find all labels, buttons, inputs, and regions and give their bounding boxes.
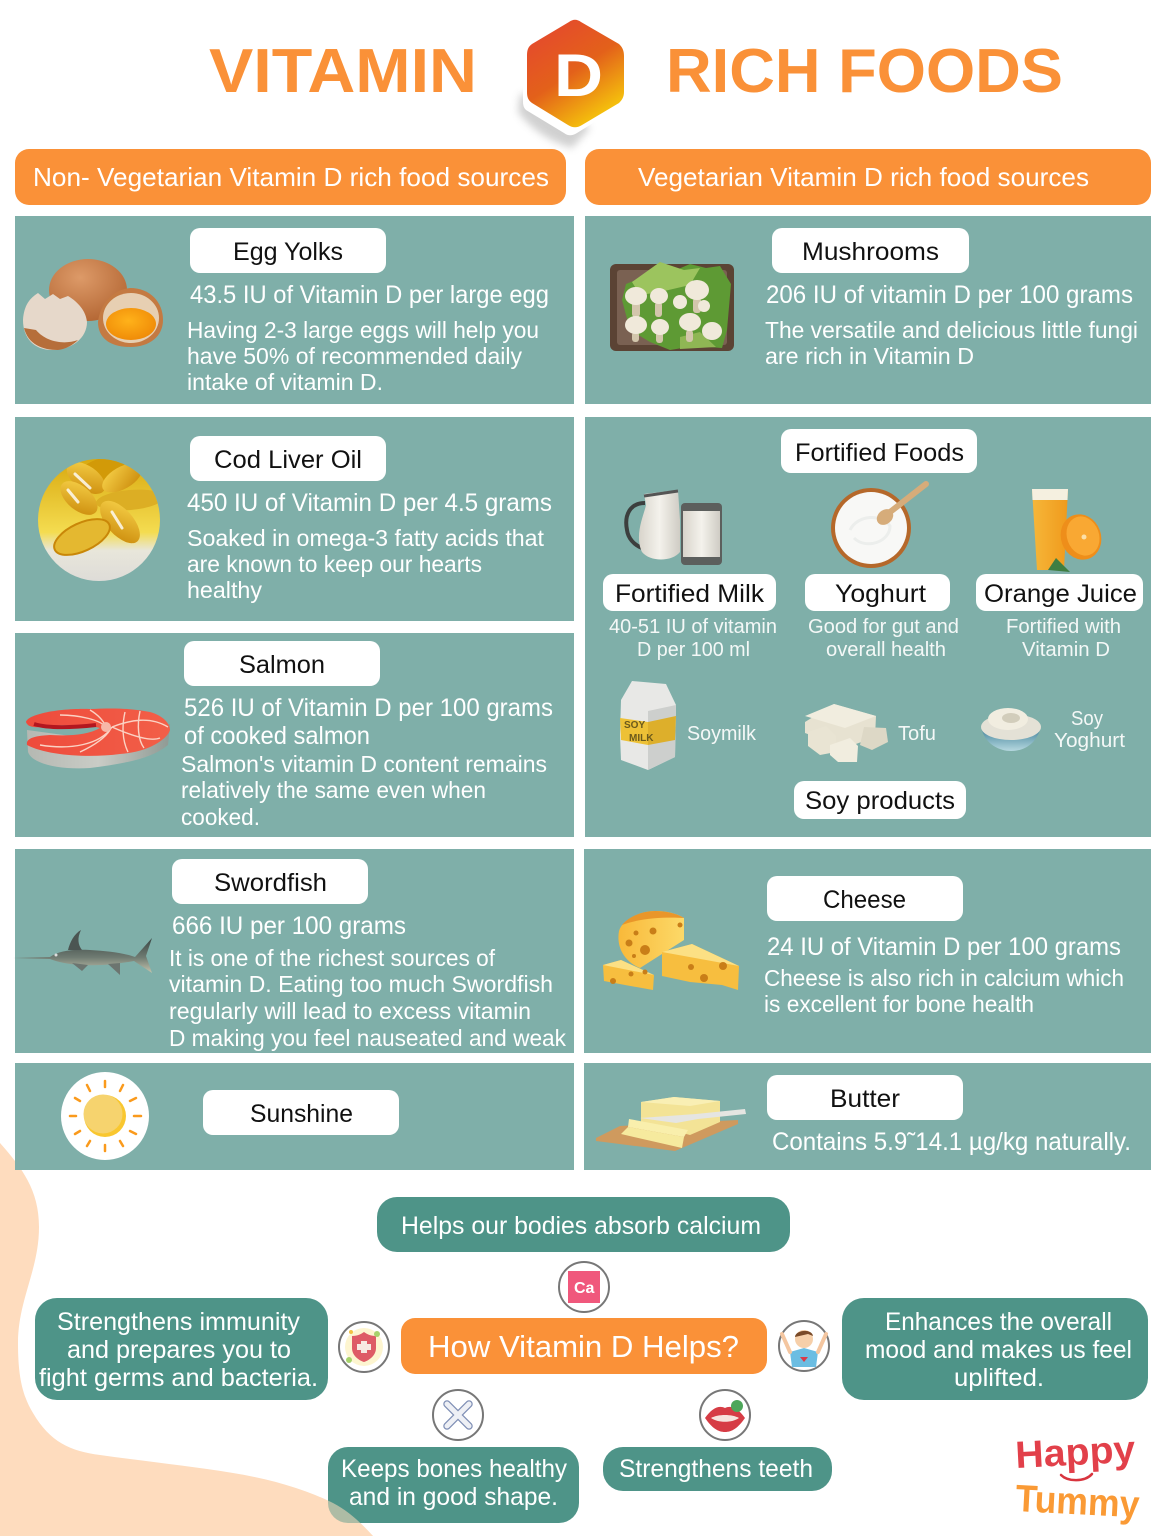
title: RICH FOODS — [666, 37, 1063, 106]
label: fortified foods — [781, 429, 977, 473]
icon: tofu cubes — [805, 704, 888, 762]
icon: yoghurt bowl — [831, 484, 926, 568]
panel: butter — [584, 1063, 1151, 1170]
callout: bones: and in good shape. — [349, 1483, 558, 1511]
label: cheese: Cheese — [823, 886, 906, 914]
heading: non-vegetarian sources — [15, 149, 566, 205]
text: fortified milk — [609, 616, 777, 661]
icon: happy person — [779, 1321, 829, 1371]
icon: soymilk carton: MILK — [629, 733, 654, 744]
logo: Happy Tummy — [1014, 1429, 1141, 1526]
label: egg yolks: Egg Yolks — [233, 238, 343, 266]
text: egg yolks: have 50% of recommended daily — [187, 343, 522, 369]
callout: mood: uplifted. — [954, 1364, 1044, 1392]
text: swordfish — [169, 912, 566, 1051]
label: cod liver oil — [190, 436, 386, 481]
icon: oil capsules — [38, 451, 165, 581]
text: salmon — [181, 694, 553, 830]
icon: calcium — [559, 1262, 609, 1312]
label: soy products: Soy products — [805, 787, 955, 815]
label: cheese — [767, 876, 963, 921]
text: yoghurt — [808, 616, 959, 661]
heading: non-vegetarian sources: Non- Vegetarian Vitamin D rich food sources — [33, 162, 549, 192]
icon: cheese wedges — [603, 911, 739, 990]
panel: cheese — [584, 849, 1151, 1053]
label: orange juice — [976, 574, 1143, 611]
text: cheese: is excellent for bone health — [764, 991, 1034, 1017]
callout: teeth — [603, 1447, 832, 1491]
callout: absorb calcium — [377, 1197, 790, 1252]
label: fortified milk — [603, 574, 776, 611]
icon: vitamin D hexagon: D — [554, 42, 603, 109]
icon: calcium: Ca — [574, 1280, 595, 1297]
panel: egg yolks — [15, 216, 574, 404]
text: swordfish: It is one of the richest sources of — [169, 945, 496, 971]
icon: orange juice — [1032, 489, 1108, 572]
icon: bones — [433, 1390, 483, 1440]
label: butter — [767, 1075, 963, 1120]
callout: immunity: fight germs and bacteria. — [39, 1364, 318, 1392]
icon: soymilk carton: SOY — [624, 720, 645, 731]
callout: mood: Enhances the overall — [885, 1308, 1112, 1336]
text: cod liver oil — [187, 489, 552, 603]
text: mushrooms: 206 IU of vitamin D per 100 grams — [766, 281, 1133, 309]
icon: sun — [61, 1072, 149, 1160]
label: sunshine — [203, 1090, 399, 1135]
label: salmon: Salmon — [239, 651, 325, 679]
heading: vegetarian sources — [585, 149, 1151, 205]
title: how vitamin D helps: How Vitamin D Helps? — [428, 1329, 739, 1364]
text: salmon: relatively the same even when — [181, 777, 486, 803]
label: fortified foods: Fortified Foods — [795, 439, 964, 467]
heading: vegetarian sources: Vegetarian Vitamin D rich food sources — [638, 162, 1089, 192]
icon: soy yoghurt bowl — [981, 708, 1041, 751]
text: cod liver oil: Soaked in omega-3 fatty acids that — [187, 525, 545, 551]
label: swordfish — [172, 859, 368, 904]
text: swordfish: D making you feel nauseated and weak — [169, 1025, 566, 1051]
text: cod liver oil: 450 IU of Vitamin D per 4.5 grams — [187, 489, 552, 517]
callout: mood: mood and makes us feel — [865, 1336, 1132, 1364]
text: yoghurt: overall health — [826, 639, 946, 661]
text: salmon: cooked. — [181, 804, 260, 830]
callout: immunity: and prepares you to — [67, 1336, 291, 1364]
label: salmon — [184, 641, 380, 686]
label: soy products — [794, 781, 966, 819]
icon: milk jug and glass — [626, 490, 722, 565]
icon: butter on a board — [596, 1097, 746, 1151]
label: mushrooms: Mushrooms — [802, 238, 939, 266]
panel: fortified foods and soy products — [585, 417, 1151, 837]
text: soymilk: Soymilk — [687, 723, 757, 745]
text: swordfish: 666 IU per 100 grams — [172, 912, 406, 940]
icon: eggs — [23, 259, 163, 350]
label: swordfish: Swordfish — [214, 869, 327, 897]
icon: vitamin D hexagon — [518, 20, 624, 148]
text: cheese — [764, 933, 1124, 1017]
callout: bones: Keeps bones healthy — [341, 1455, 567, 1483]
text: butter: Contains 5.9˜14.1 µg/kg naturally. — [772, 1128, 1131, 1156]
label: butter: Butter — [830, 1085, 900, 1113]
callout: immunity — [35, 1298, 328, 1400]
panel: sunshine — [15, 1063, 574, 1170]
label: yoghurt — [805, 574, 950, 611]
text: orange juice: Fortified with — [1006, 616, 1121, 638]
text: cod liver oil: healthy — [187, 577, 262, 603]
label: mushrooms — [772, 228, 969, 273]
text: mushrooms: The versatile and delicious little fungi — [765, 317, 1138, 343]
icon: soymilk carton — [620, 681, 676, 770]
callout: bones — [328, 1447, 579, 1523]
text: soy yoghurt — [1054, 708, 1125, 752]
panel: cod liver oil — [15, 417, 574, 621]
icon: lips — [700, 1390, 750, 1440]
text: swordfish: vitamin D. Eating too much Swordfish — [169, 971, 553, 997]
label: cod liver oil: Cod Liver Oil — [214, 446, 362, 474]
background blob — [0, 1143, 373, 1536]
title: VITAMIN — [209, 37, 477, 106]
text: fortified milk: 40-51 IU of vitamin — [609, 616, 777, 638]
text: fortified milk: D per 100 ml — [637, 639, 750, 661]
text: soy yoghurt: Yoghurt — [1054, 730, 1125, 752]
callout: teeth: Strengthens teeth — [619, 1455, 813, 1483]
callout: absorb calcium: Helps our bodies absorb calcium — [401, 1212, 761, 1240]
text: salmon: Salmon's vitamin D content remains — [181, 751, 547, 777]
label: sunshine: Sunshine — [250, 1100, 353, 1128]
callout: immunity: Strengthens immunity — [57, 1308, 300, 1336]
icon: swordfish — [13, 930, 152, 975]
label: orange juice: Orange Juice — [984, 580, 1137, 608]
panel: mushrooms — [585, 216, 1151, 404]
text: orange juice — [1006, 616, 1121, 661]
text: swordfish: regularly will lead to excess vitamin — [169, 998, 531, 1024]
callout: mood — [842, 1298, 1148, 1400]
text: egg yolks: 43.5 IU of Vitamin D per large egg — [190, 281, 549, 309]
panel: swordfish — [13, 849, 574, 1053]
icon: mushrooms on a tray — [610, 262, 734, 351]
text: mushrooms — [765, 281, 1138, 369]
title: how vitamin D helps — [401, 1318, 767, 1374]
icon: shield — [339, 1322, 389, 1372]
text: orange juice: Vitamin D — [1022, 639, 1110, 661]
text: salmon: 526 IU of Vitamin D per 100 grams — [184, 694, 553, 722]
text: tofu: Tofu — [898, 723, 936, 745]
text: egg yolks — [187, 281, 549, 395]
text: cod liver oil: are known to keep our hearts — [187, 551, 482, 577]
logo: Happy Tummy: Tummy — [1015, 1478, 1141, 1526]
text: egg yolks: Having 2-3 large eggs will help you — [187, 317, 539, 343]
text: salmon: of cooked salmon — [184, 722, 370, 750]
text: mushrooms: are rich in Vitamin D — [765, 343, 974, 369]
text: yoghurt: Good for gut and — [808, 616, 959, 638]
label: fortified milk: Fortified Milk — [615, 580, 765, 608]
text: cheese: 24 IU of Vitamin D per 100 grams — [767, 933, 1121, 961]
text: cheese: Cheese is also rich in calcium which — [764, 965, 1124, 991]
text: egg yolks: intake of vitamin D. — [187, 369, 383, 395]
icon: salmon steak — [26, 708, 170, 768]
panel: salmon — [15, 633, 574, 837]
label: egg yolks — [190, 228, 386, 273]
title — [209, 20, 1063, 148]
label: yoghurt: Yoghurt — [835, 580, 926, 608]
text: soy yoghurt: Soy — [1071, 708, 1103, 730]
logo: Happy Tummy: Happy — [1014, 1429, 1136, 1477]
